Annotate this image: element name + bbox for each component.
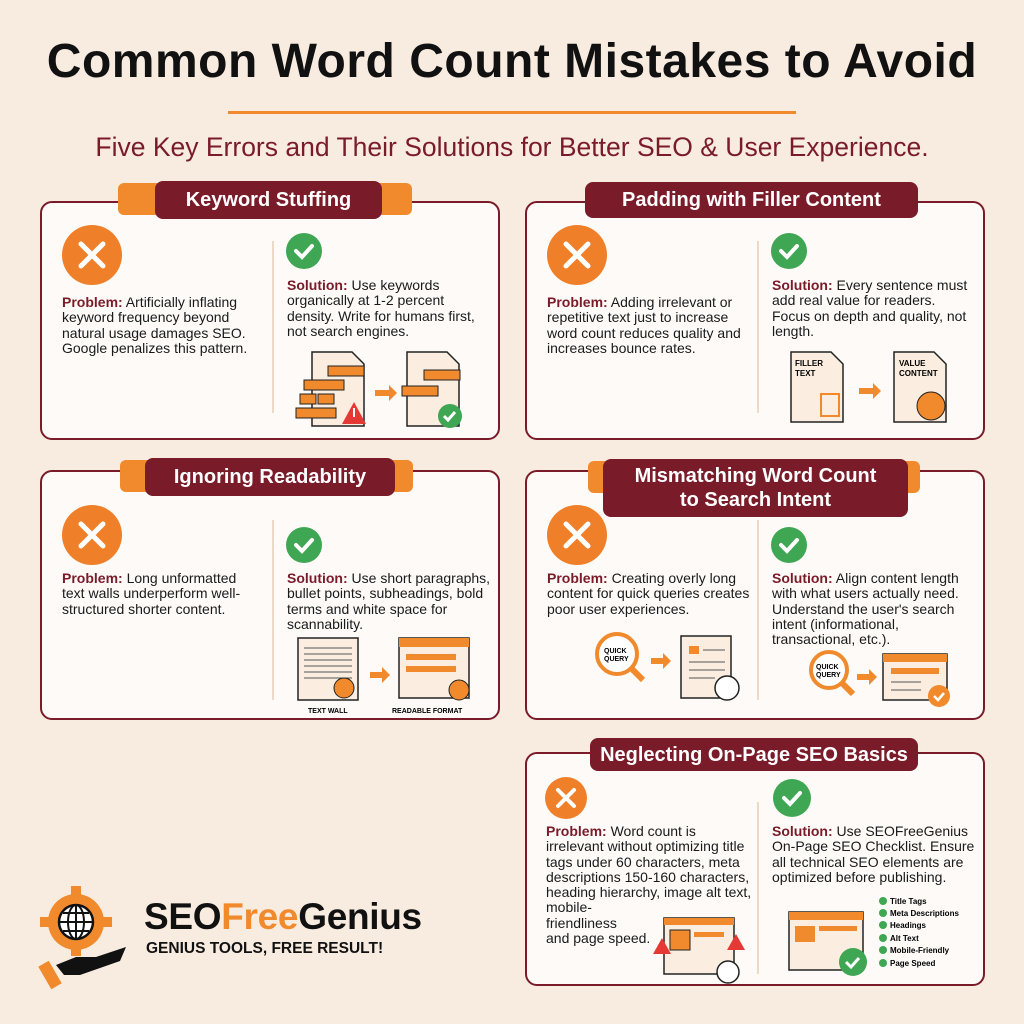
problem text: Problem: Artificially inflating keyword frequency beyond natural usage damages SEO. Google penalizes this pattern.	[62, 294, 247, 356]
illustration: checklist: Title Tags	[890, 897, 927, 906]
title: Common Word Count Mistakes to Avoid	[47, 35, 977, 88]
problem text: Problem: Word count is irrelevant without optimizing title tags under 60 characters, meta descriptions 150-160 characters, heading hierarchy, image alt text, mobile-	[546, 823, 751, 915]
solution text: Solution: Every sentence must add real value for readers. Focus on depth and quality, not length.	[772, 277, 967, 339]
illustration: checklist: Meta Descriptions	[890, 909, 959, 918]
tab: keyword stuffing: Keyword Stuffing	[186, 189, 351, 211]
illustration: checklist: Alt Text	[890, 934, 919, 943]
icon: solution check	[286, 233, 322, 269]
tab: ignoring readability: Ignoring Readability	[174, 466, 366, 488]
subtitle: Five Key Errors and Their Solutions for Better SEO & User Experience.	[95, 132, 929, 162]
tab: ignoring readability	[120, 458, 413, 496]
tab: neglecting on-page SEO: Neglecting On-Page SEO Basics	[600, 744, 908, 766]
brand name: SEOFreeGenius	[144, 896, 422, 937]
illustration: quick query to long doc: QUICK	[604, 648, 627, 655]
panel: neglecting on-page SEO	[525, 752, 985, 986]
problem text: Problem: Adding irrelevant or repetitive text just to increase word count reduces quality and increases bounce rates.	[547, 294, 741, 356]
illustration: quick query to long doc	[595, 632, 740, 701]
panel: mismatching search intent: QUICK	[816, 664, 839, 671]
illustration: text wall to readable: TEXT WALL	[308, 708, 348, 715]
illustration: text wall to readable	[297, 637, 470, 715]
icon: problem X	[547, 225, 607, 285]
illustration: text wall to readable: READABLE FORMAT	[392, 708, 463, 715]
illustration: checklist: Headings	[890, 921, 927, 930]
icon: gear globe hand	[38, 886, 126, 990]
illustration: filler to value: TEXT	[795, 369, 816, 378]
tab: keyword stuffing	[118, 181, 412, 219]
icon: solution check	[771, 233, 807, 269]
panel: keyword stuffing	[40, 201, 500, 440]
icon: solution check	[773, 779, 811, 817]
tab: mismatching search intent	[588, 459, 920, 517]
solution text: Solution: Use keywords organically at 1-2 percent density. Write for humans first, not search engines.	[287, 277, 475, 339]
tab: mismatching search intent: Mismatching Word Count	[635, 465, 876, 487]
panel: ignoring readability	[40, 470, 500, 720]
solution text: Solution: Use short paragraphs, bullet points, subheadings, bold terms and white space for scannability.	[287, 570, 490, 632]
illustration: filler to value: FILLER	[795, 359, 823, 368]
icon: problem X	[62, 225, 122, 285]
tagline: GENIUS TOOLS, FREE RESULT!	[146, 940, 383, 957]
problem text: Problem: Long unformatted text walls underperform well-structured shorter content.	[62, 570, 240, 617]
illustration: checklist: Page Speed	[890, 959, 935, 968]
problem text: friendliness	[546, 915, 617, 931]
panel: padding with filler	[525, 201, 985, 440]
illustration: filler to value: VALUE	[899, 359, 926, 368]
icon: solution check	[286, 527, 322, 563]
solution text: Solution: Use SEOFreeGenius On-Page SEO Checklist. Ensure all technical SEO elements are optimized before publishing.	[772, 823, 974, 885]
solution text: Solution: Align content length with what users actually need. Understand the user's search intent (informational, transactional, etc.).	[772, 570, 959, 647]
illustration: quick query to long doc: QUERY	[604, 656, 629, 663]
title underline	[228, 111, 796, 114]
illustration: checklist: Mobile-Friendly	[890, 946, 950, 955]
icon: problem X	[547, 505, 607, 565]
illustration: filler to value	[790, 351, 947, 423]
logo	[38, 886, 422, 990]
problem text: and page speed.	[546, 930, 650, 946]
illustration: keyword docs	[296, 351, 462, 428]
illustration: broken page	[653, 917, 745, 984]
icon: solution check	[771, 527, 807, 563]
icon: problem X	[62, 505, 122, 565]
tab: mismatching search intent: to Search Intent	[680, 489, 831, 511]
icon: problem X	[545, 777, 587, 819]
illustration: checklist	[788, 897, 959, 976]
tab: padding with filler: Padding with Filler Content	[622, 189, 881, 211]
illustration: filler to value: CONTENT	[899, 369, 938, 378]
panel: mismatching search intent: QUERY	[816, 672, 841, 679]
problem text: Problem: Creating overly long content for quick queries creates poor user experiences.	[547, 570, 749, 617]
panel: mismatching search intent	[525, 470, 985, 720]
